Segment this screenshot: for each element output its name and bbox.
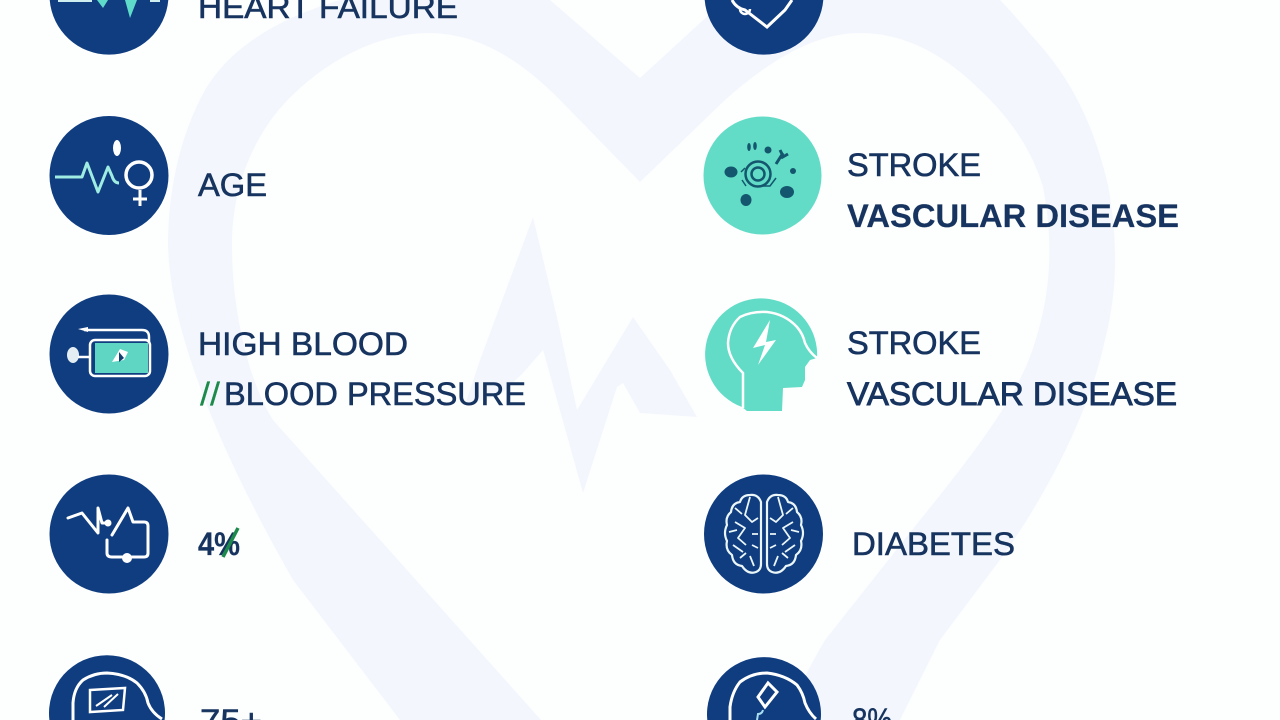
icon: blood pressure monitor [50, 294, 168, 414]
icon: brain [704, 474, 823, 594]
label: diabetes: DIABETES [852, 526, 1015, 562]
label: slashes: // [200, 376, 220, 412]
row: heart top right [705, 0, 823, 55]
label: vascular disease: VASCULAR DISEASE [847, 376, 1177, 412]
row: stroke vascular disease 2 [705, 298, 1177, 412]
icon: heart waveform [50, 0, 168, 55]
icon: heart pulse outline [50, 474, 168, 594]
row: 8 percent [707, 657, 892, 720]
row: 4 percent [50, 474, 240, 594]
label: blood pressure: BLOOD PRESSURE [224, 376, 526, 412]
row: heart failure [50, 0, 458, 55]
icon: head with lightning [705, 298, 817, 411]
label: vascular disease: VASCULAR DISEASE [847, 198, 1179, 234]
label: stroke: STROKE [847, 325, 981, 361]
label: age: AGE [198, 167, 267, 203]
icon: heart outline [705, 0, 823, 55]
row: age [50, 116, 267, 235]
background ECG line [465, 217, 697, 493]
icon: head with spark [707, 657, 821, 720]
row: stroke vascular disease 1 [704, 116, 1179, 234]
row: high blood pressure [50, 294, 526, 414]
row: diabetes [704, 474, 1015, 594]
label: 4 percent: 4% [198, 526, 240, 562]
label: high blood: HIGH BLOOD [198, 326, 408, 362]
icon: pulse and gender symbol [50, 116, 168, 235]
label: stroke: STROKE [847, 147, 981, 183]
icon: head with document [49, 655, 165, 720]
icon: cell particles [704, 116, 822, 234]
row: 75 plus [49, 655, 262, 720]
background heart outline [168, 0, 1115, 720]
